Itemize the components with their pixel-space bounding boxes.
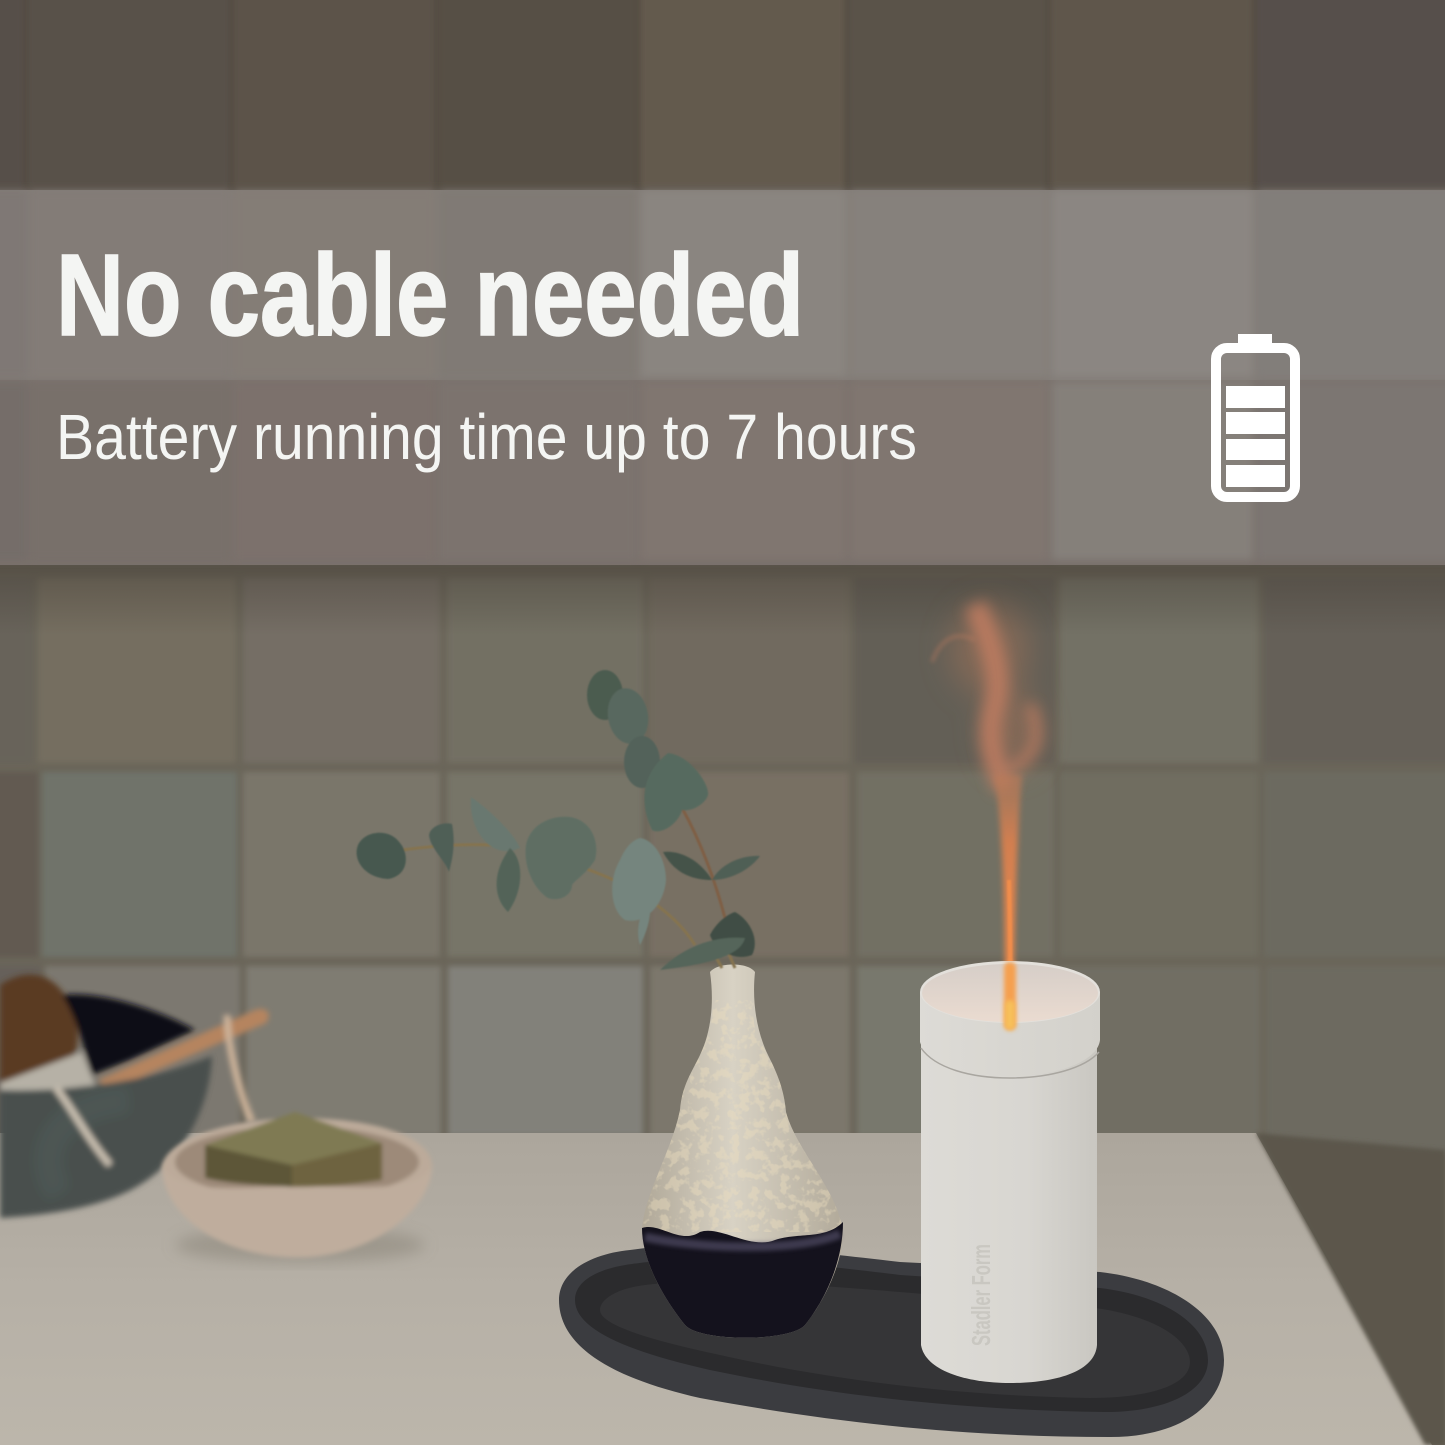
rim opening xyxy=(920,961,1100,1023)
icon: battery xyxy=(1216,334,1295,497)
embossed logo: Stadler Form xyxy=(966,1244,996,1346)
glaze speckles xyxy=(642,1000,843,1232)
soap bowl xyxy=(162,1112,432,1263)
lid xyxy=(920,992,1100,1076)
title: No cable needed xyxy=(56,230,804,360)
tiles: lower wall xyxy=(0,578,1445,1156)
soap xyxy=(205,1112,382,1187)
translucent text band xyxy=(0,190,1445,565)
leaves xyxy=(357,670,760,970)
flame glow xyxy=(1004,962,1016,1030)
body xyxy=(921,1040,1097,1383)
subtitle: Battery running time up to 7 hours xyxy=(56,401,917,473)
smoke plume xyxy=(932,605,1038,1002)
dark glaze base xyxy=(642,1222,843,1338)
tray xyxy=(559,1246,1224,1437)
vase xyxy=(642,964,843,1338)
background bowl with sponge xyxy=(0,975,269,1218)
table xyxy=(0,1133,1445,1445)
table right shadow side xyxy=(1256,1133,1445,1445)
diffuser xyxy=(920,961,1100,1383)
eucalyptus branch xyxy=(357,670,760,970)
stems xyxy=(402,808,735,968)
tiles: top row xyxy=(0,0,1445,188)
